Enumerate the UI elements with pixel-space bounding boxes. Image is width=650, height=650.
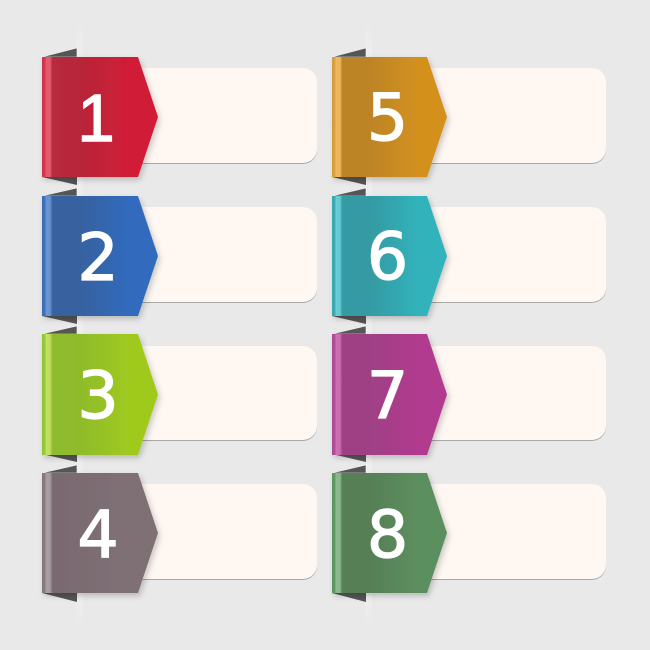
panel: item 8 bbox=[332, 473, 606, 593]
card 8 bbox=[410, 484, 606, 579]
card 3 bbox=[120, 346, 317, 440]
panel: item 5 bbox=[332, 57, 606, 177]
number 4: 4 bbox=[77, 498, 119, 573]
panel: item 4 bbox=[42, 473, 317, 593]
blue tag bbox=[42, 196, 158, 316]
card 7 bbox=[410, 346, 606, 440]
green tag bbox=[42, 334, 158, 455]
number 6: 6 bbox=[367, 220, 408, 295]
number 3: 3 bbox=[77, 359, 119, 434]
number 1: 1 bbox=[77, 81, 115, 156]
card 2 bbox=[120, 207, 317, 302]
panel: item 6 bbox=[332, 196, 606, 316]
left column ribbon spine bbox=[42, 22, 83, 628]
orange tag bbox=[332, 57, 447, 177]
number 5: 5 bbox=[367, 81, 408, 156]
card 1 bbox=[120, 68, 317, 163]
panel: item 2 bbox=[42, 196, 317, 316]
teal tag bbox=[332, 196, 447, 316]
number 8: 8 bbox=[367, 498, 408, 573]
number 2: 2 bbox=[77, 221, 119, 296]
card 5 bbox=[410, 68, 606, 163]
card 4 bbox=[120, 484, 317, 579]
panel: item 1 bbox=[42, 57, 317, 177]
right column ribbon spine bbox=[332, 22, 372, 628]
card 6 bbox=[410, 207, 606, 302]
number 7: 7 bbox=[367, 359, 408, 434]
purple tag bbox=[332, 334, 447, 455]
panel: item 7 bbox=[332, 334, 606, 455]
panel: item 3 bbox=[42, 334, 317, 455]
red tag bbox=[42, 57, 158, 177]
dark green tag bbox=[332, 473, 447, 593]
grey tag bbox=[42, 473, 158, 593]
